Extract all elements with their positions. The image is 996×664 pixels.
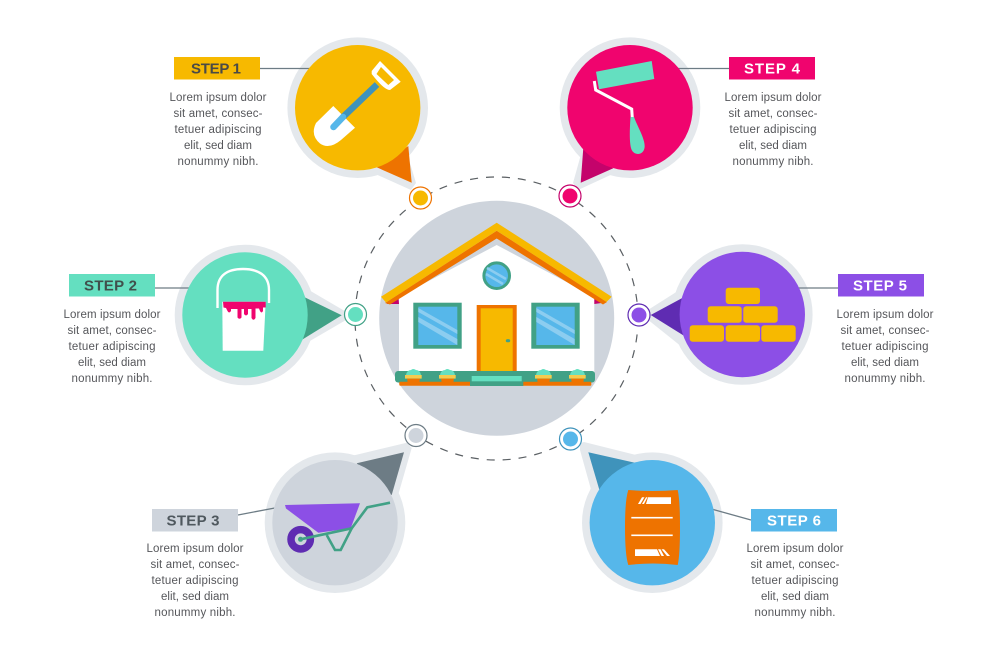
panel: step 3 [146, 424, 427, 619]
step 5 text [836, 309, 934, 385]
step 6 text: nonummy nibh. [754, 607, 836, 619]
step 5 node [628, 304, 650, 326]
step 3 label [152, 509, 238, 532]
step 6 text: sit amet, consec- [750, 559, 840, 571]
step 5 label [838, 274, 924, 296]
step 5 text: Lorem ipsum dolor [836, 309, 934, 321]
step 3 text: sit amet, consec- [150, 559, 240, 571]
icon: paint roller [594, 61, 654, 154]
step 5 text: tetuer adipiscing [842, 341, 928, 353]
porch base [395, 371, 595, 386]
panel: step 6 [560, 428, 844, 619]
step 3 node [405, 424, 427, 446]
central house illustration [379, 201, 614, 436]
step 1 text: sit amet, consec- [174, 108, 263, 120]
step 1 text: tetuer adipiscing [174, 124, 262, 136]
step 4 text: tetuer adipiscing [730, 124, 816, 136]
step 4 label: STEP 4 [744, 60, 801, 78]
step 1 node [410, 187, 432, 209]
icon: paint bucket [218, 269, 269, 351]
step 3 text: nonummy nibh. [154, 607, 236, 619]
dashed ring [355, 177, 638, 460]
step 2 text: nonummy nibh. [72, 373, 152, 385]
step 1 label [174, 57, 260, 80]
step 1 text: nonummy nibh. [178, 156, 258, 168]
step 6 label [751, 509, 837, 532]
step 1 text [170, 92, 267, 168]
step 2 label [69, 274, 155, 296]
step 3 text: Lorem ipsum dolor [146, 543, 244, 555]
step 4 text: elit, sed diam [739, 140, 807, 152]
left window [413, 303, 462, 349]
step 3 label: STEP 3 [166, 512, 220, 530]
step 4 label [729, 57, 815, 80]
step 3 text: elit, sed diam [161, 591, 229, 603]
flower pots [405, 369, 586, 384]
step 5 text: sit amet, consec- [840, 325, 930, 337]
step 2 text: Lorem ipsum dolor [64, 309, 161, 321]
step 2 text: sit amet, consec- [68, 325, 157, 337]
step 6 text: tetuer adipiscing [752, 575, 838, 587]
icon: cement bag [625, 490, 680, 565]
right window [531, 303, 580, 349]
step 6 text: Lorem ipsum dolor [746, 543, 844, 555]
panel: step 1 [170, 37, 432, 209]
panel: step 5 [628, 244, 934, 385]
step 3 text: tetuer adipiscing [152, 575, 238, 587]
round window [484, 263, 510, 289]
step 3 text [146, 543, 244, 619]
icon: wheelbarrow [285, 503, 390, 550]
step 4 text [724, 92, 822, 168]
step 4 node [559, 185, 581, 207]
icon: bricks [690, 288, 796, 342]
step 2 text [64, 309, 161, 385]
step 1 text: Lorem ipsum dolor [170, 92, 267, 104]
step 2 label: STEP 2 [84, 278, 137, 294]
step 5 text: elit, sed diam [851, 357, 919, 369]
step 5 text: nonummy nibh. [844, 373, 926, 385]
step 6 node [560, 428, 582, 450]
step 5 label: STEP 5 [853, 278, 907, 294]
step 6 text [746, 543, 844, 619]
step 2 text: tetuer adipiscing [68, 341, 156, 353]
panel: step 4 [559, 37, 822, 207]
panel: step 2 [64, 245, 366, 385]
step 6 text: elit, sed diam [761, 591, 829, 603]
step 4 text: nonummy nibh. [732, 156, 814, 168]
door [477, 305, 517, 372]
step 2 text: elit, sed diam [78, 357, 146, 369]
icon: shovel [314, 61, 401, 146]
step 2 node [344, 304, 366, 326]
step 4 text: sit amet, consec- [728, 108, 818, 120]
step 1 label: STEP 1 [191, 60, 241, 78]
step 6 label: STEP 6 [767, 512, 821, 530]
step 4 text: Lorem ipsum dolor [724, 92, 822, 104]
step 1 text: elit, sed diam [184, 140, 252, 152]
